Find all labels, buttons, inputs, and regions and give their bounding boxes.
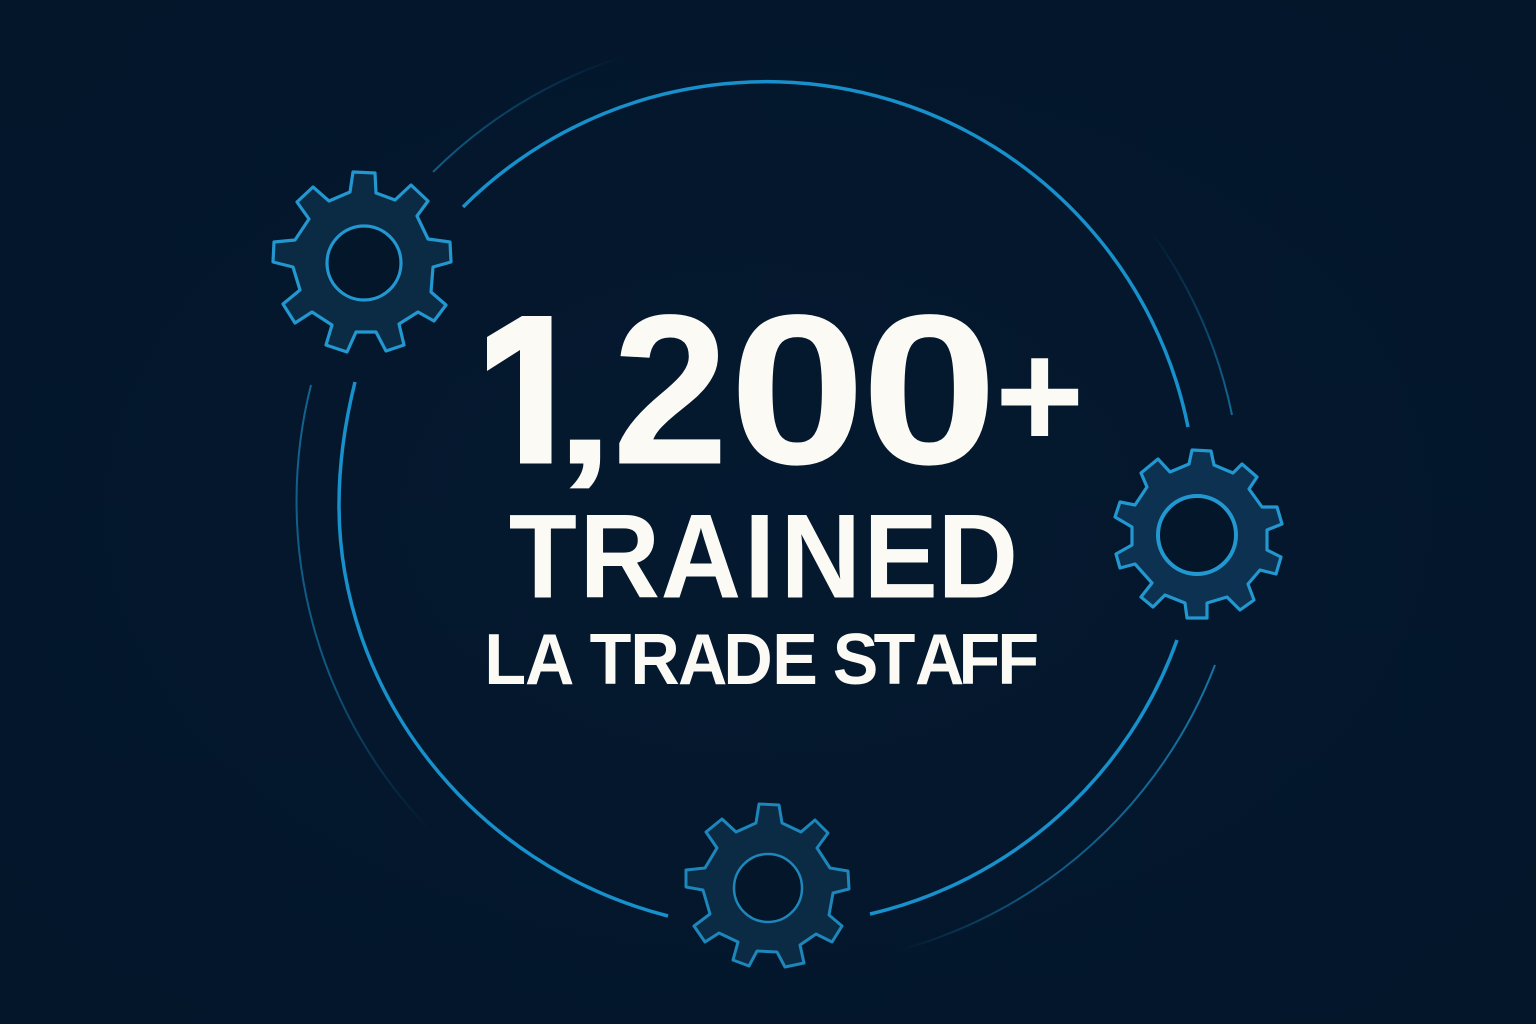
headline number: 0: [729, 270, 866, 509]
headline number: 2: [612, 270, 729, 509]
icon: gear top left: [273, 172, 451, 352]
outer faint ring: arc segments: [297, 57, 1232, 950]
headline number: +: [995, 310, 1084, 481]
headline number: ,: [555, 319, 614, 498]
headline number: 1: [470, 270, 594, 509]
infographic canvas: [271, 65, 1284, 968]
subheading: LA trade staff: LA TRADE STAFF: [484, 618, 1039, 699]
main ring: arc segments: [339, 82, 1188, 916]
icon: gear right: [1115, 450, 1282, 618]
heading: trained: TRAINED: [509, 489, 1018, 623]
headline number: [487, 314, 1078, 488]
headline number: 0: [861, 270, 998, 509]
icon: gear bottom: [686, 804, 849, 967]
